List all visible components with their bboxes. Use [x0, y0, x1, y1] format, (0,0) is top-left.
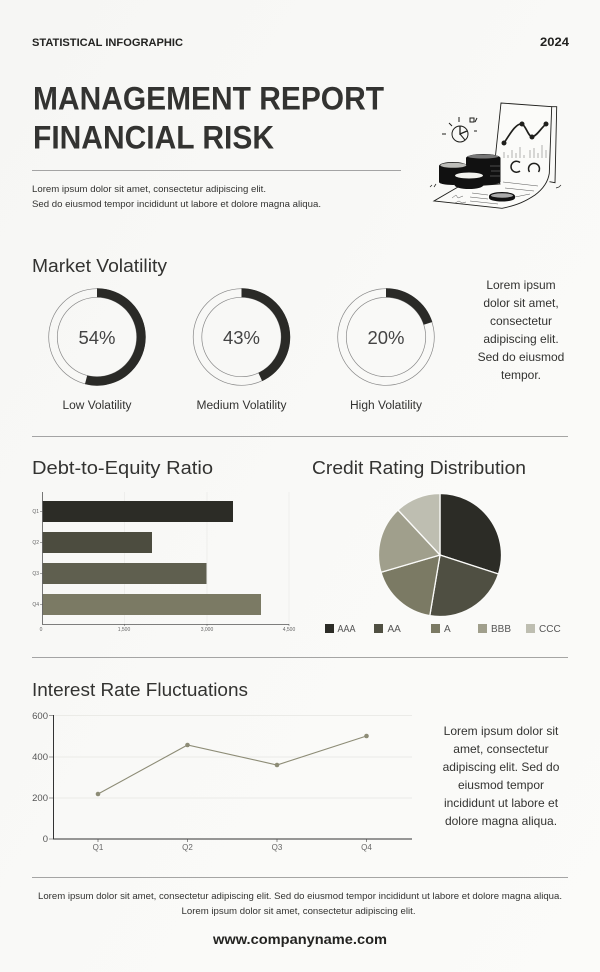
legend: credit ratings: BBB: [491, 624, 511, 635]
title: MANAGEMENT REPORT: [33, 80, 384, 116]
text block: interest rate note: eiusmod tempor: [458, 778, 544, 792]
footer text: Lorem ipsum dolor sit amet, consectetur adipiscing elit.: [182, 906, 416, 917]
line chart: interest rate fluctuations: 400: [32, 752, 48, 763]
bar chart: debt-to-equity: Q2: [32, 540, 39, 546]
line chart: interest rate fluctuations: Q1: [93, 843, 104, 852]
text block: volatility note: adipiscing elit.: [483, 332, 559, 346]
icon: clock: [442, 117, 477, 142]
text block: volatility note: tempor.: [501, 368, 541, 382]
line chart: interest rate fluctuations: [32, 711, 412, 852]
text block: volatility note: Lorem ipsum: [486, 278, 556, 292]
donut: high volatility: 20%: [368, 327, 404, 348]
bar chart: debt-to-equity: Q4: [32, 602, 39, 608]
bar chart: debt-to-equity: Q1: [32, 509, 39, 515]
donut: high volatility: [338, 289, 434, 412]
pie chart: credit rating distribution: [378, 493, 502, 617]
icon: report page: [430, 103, 561, 208]
bar chart: debt-to-equity: Q3: [32, 571, 39, 577]
text block: volatility note: consectetur: [490, 314, 552, 328]
footer text: Lorem ipsum dolor sit amet, consectetur adipiscing elit. Sed do eiusmod tempor incididunt ut labore et dolore magna aliqua.: [38, 891, 562, 902]
icon: coin stacks: [439, 154, 515, 202]
text block: interest rate note: adipiscing elit. Sed do: [443, 760, 560, 774]
heading: credit rating distribution: Credit Rating Distribution: [312, 457, 526, 478]
text block: interest rate note: dolore magna aliqua.: [445, 814, 557, 828]
text block: interest rate note: amet, consectetur: [453, 742, 549, 756]
intro text: [32, 184, 321, 210]
text block: interest rate note: [443, 724, 560, 828]
donut: medium volatility: 43%: [223, 327, 260, 348]
website: www.companyname.com: [212, 931, 387, 947]
donut: low volatility: Low Volatility: [62, 400, 132, 412]
donut: medium volatility: Medium Volatility: [196, 400, 287, 412]
bar chart: debt-to-equity: 3,000: [201, 627, 213, 633]
year: 2024: [540, 37, 570, 49]
line chart: interest rate fluctuations: 200: [32, 793, 48, 804]
intro text: Lorem ipsum dolor sit amet, consectetur adipiscing elit.: [32, 184, 266, 195]
footer text: [38, 891, 562, 917]
heading: interest rate fluctuations: Interest Rate Fluctuations: [32, 679, 248, 700]
bar chart: debt-to-equity: 1,500: [118, 627, 130, 633]
line chart: interest rate fluctuations: Q3: [272, 843, 283, 852]
line chart: interest rate fluctuations: 600: [32, 711, 48, 722]
title: FINANCIAL RISK: [33, 119, 274, 155]
line chart: interest rate fluctuations: 0: [43, 834, 48, 845]
text block: volatility note: Sed do eiusmod: [478, 350, 564, 364]
heading: market volatility: Market Volatility: [32, 255, 168, 276]
text block: interest rate note: Lorem ipsum dolor sit: [444, 724, 559, 738]
icon: finance illustration: [430, 103, 561, 208]
legend: credit ratings: CCC: [539, 624, 561, 635]
bar chart: debt-to-equity: [32, 492, 295, 633]
legend: credit ratings: AA: [388, 624, 401, 635]
heading: debt-to-equity ratio: Debt-to-Equity Ratio: [32, 457, 213, 478]
text block: volatility note: dolor sit amet,: [483, 296, 559, 310]
text block: volatility note: [478, 278, 564, 382]
donut: low volatility: [49, 289, 145, 412]
intro text: Sed do eiusmod tempor incididunt ut labore et dolore magna aliqua.: [32, 199, 321, 210]
donut: high volatility: High Volatility: [350, 400, 422, 412]
text block: interest rate note: incididunt ut labore et: [444, 796, 559, 810]
line chart: interest rate fluctuations: Q2: [182, 843, 193, 852]
title: [33, 80, 384, 155]
header label: STATISTICAL INFOGRAPHIC: [32, 37, 183, 49]
bar chart: debt-to-equity: 4,500: [283, 627, 295, 633]
donut: medium volatility: [193, 289, 290, 412]
donut: low volatility: 54%: [78, 327, 116, 348]
bar chart: debt-to-equity: 0: [40, 627, 43, 633]
line chart: interest rate fluctuations: Q4: [361, 843, 372, 852]
legend: credit ratings: [325, 624, 561, 635]
legend: credit ratings: A: [444, 624, 451, 635]
legend: credit ratings: AAA: [338, 624, 356, 635]
